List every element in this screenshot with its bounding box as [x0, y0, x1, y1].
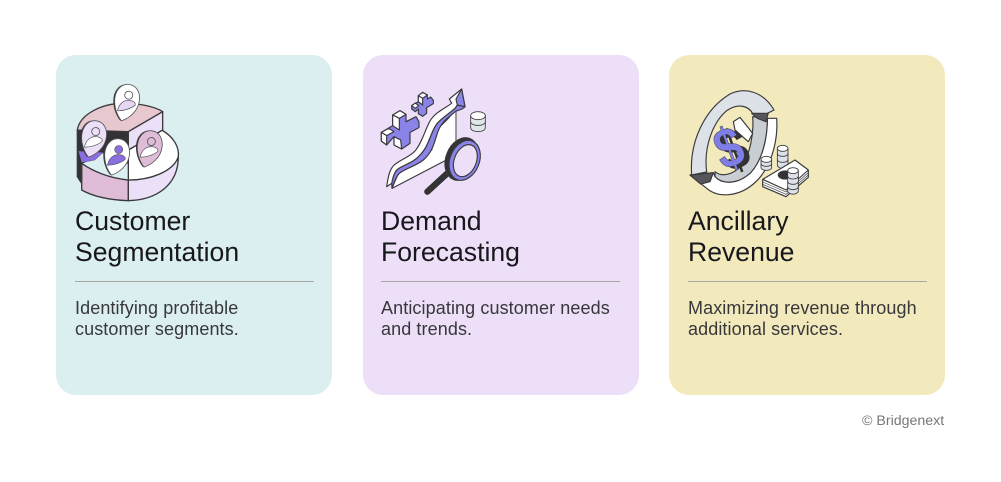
text block: Identifying profitable: [75, 298, 238, 318]
heading: [381, 206, 520, 267]
heading: Revenue: [688, 237, 794, 267]
text block: [75, 298, 239, 339]
text block: and trends.: [381, 319, 472, 339]
icon: pin right: [133, 129, 164, 169]
heading: [688, 206, 794, 267]
icon: large plus: [381, 111, 419, 149]
panel: ancillary revenue: [669, 55, 945, 395]
heading: Ancillary: [688, 206, 788, 236]
icon: pin centre: [101, 137, 131, 177]
heading: Customer: [75, 206, 190, 236]
text block: customer segments.: [75, 319, 239, 339]
text block: Maximizing revenue through: [688, 298, 917, 318]
icon: rising arrow, plus signs, coins and magnifier: [380, 88, 486, 195]
icon: chart area and arrow: [387, 89, 465, 188]
text block: Anticipating customer needs: [381, 298, 610, 318]
heading: Demand: [381, 206, 482, 236]
icon: segmented pie with customer pins: [76, 84, 180, 202]
icon: pin left: [78, 119, 108, 159]
icon: banknotes: [763, 160, 808, 197]
icon: dollar sign: $: [711, 116, 758, 185]
icon: dollar sign: $: [705, 114, 752, 183]
icon: lower white arrow with inner wall: [690, 113, 777, 195]
icon: small plus: [412, 92, 433, 116]
icon: upper grey arrow: [691, 91, 774, 175]
icon: coin stack: [471, 112, 485, 132]
text block: additional services.: [688, 319, 843, 339]
text block: [381, 298, 610, 339]
panel: demand forecasting: [363, 55, 639, 395]
icon: front coin stack: [788, 168, 798, 194]
icon: circular arrows, dollar sign, coins and banknotes: [689, 90, 809, 198]
heading: Forecasting: [381, 237, 520, 267]
footer credit: © Bridgenext: [862, 413, 944, 429]
icon: magnifier: [427, 133, 486, 192]
icon: coin stacks: [761, 145, 788, 170]
heading: [75, 206, 239, 267]
icon: pin top: [111, 83, 141, 123]
panel: customer segmentation: [56, 55, 332, 395]
heading: Segmentation: [75, 237, 239, 267]
text block: [688, 298, 917, 339]
